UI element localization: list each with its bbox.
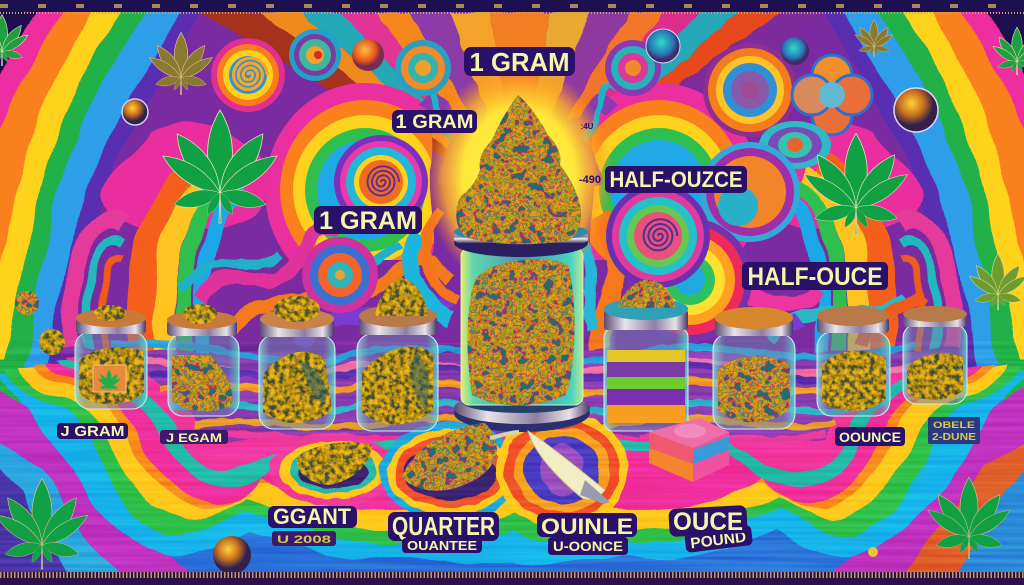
jar 3 — [259, 296, 335, 429]
jar 6 striped — [604, 280, 688, 431]
rings swirl: right — [759, 121, 831, 169]
cyan — [0, 375, 1024, 563]
label: small mark: :4U — [581, 122, 594, 131]
bud inside jar — [467, 260, 575, 406]
upper stripe field — [72, 352, 952, 443]
label: ggant: GGANT — [273, 504, 352, 529]
rainbow pool under large bud — [380, 422, 520, 522]
orb: left small — [122, 99, 148, 125]
swirl: above right of bud — [605, 40, 661, 96]
floor bands — [0, 352, 1024, 575]
label: ggant sub — [272, 531, 336, 546]
label: ounce two line — [928, 417, 980, 444]
central glow — [425, 63, 613, 293]
label: ounce two line: OBELE — [933, 420, 975, 430]
swirl: above left of bud — [395, 40, 451, 96]
orb: teal top — [646, 29, 680, 63]
jar 2 — [167, 304, 239, 416]
jar 1 — [75, 305, 147, 409]
label: pound — [684, 525, 753, 553]
label: quarter sub: OUANTEE — [407, 538, 477, 553]
orange-yellow inner — [32, 366, 992, 510]
leaf: top right — [991, 27, 1024, 75]
orb: gold right — [894, 88, 938, 132]
orb: orange top — [352, 39, 384, 71]
small side buds — [15, 291, 65, 355]
rainbow arch: lower right — [628, 218, 752, 342]
quatrefoil swirl — [792, 55, 872, 135]
jar 9 — [903, 306, 967, 404]
leaf: top left — [0, 15, 30, 66]
top ruler strip — [0, 0, 1024, 13]
right side rainbow — [814, 0, 1024, 420]
spiral: right centre — [606, 184, 710, 288]
label: half-ouzce prefix: -490 — [579, 174, 601, 186]
jar 7 — [713, 307, 795, 429]
jar 1 label — [93, 365, 126, 392]
label: ouinle sub: U-OONCE — [553, 538, 623, 554]
central big jar — [454, 95, 590, 432]
jar lid — [454, 222, 588, 257]
pink — [42, 365, 982, 510]
leaf: right edge olive — [967, 254, 1024, 310]
floor bud large — [402, 423, 519, 491]
green — [5, 370, 1019, 544]
pink edible block — [649, 418, 729, 482]
spiral: top left — [211, 38, 285, 112]
label: small gram 2 — [160, 430, 228, 445]
orb: bottom gold — [213, 536, 251, 574]
swirl: lower left of centre — [302, 237, 378, 313]
label: small gram 2: J EGAM — [166, 431, 222, 445]
giant bud — [456, 95, 581, 244]
left side rainbow — [0, 0, 210, 420]
floor bud small — [297, 442, 372, 485]
label: half-ouce: HALF-OUCE — [748, 263, 882, 291]
right magenta cloud and rainbow band — [753, 121, 953, 370]
paint streak texture — [0, 340, 1024, 572]
orb: small gold bottom right — [868, 547, 878, 557]
label: ouce: OUCE — [673, 508, 743, 536]
bottom ruler strip — [0, 572, 1024, 585]
label: third 1 gram: 1 GRAM — [319, 207, 417, 235]
leaf: upper left brown — [147, 32, 215, 94]
label: second 1 gram: 1 GRAM — [396, 112, 474, 133]
leaf: bottom left — [0, 479, 91, 569]
label: ounce two line: 2-DUNE — [932, 432, 976, 443]
left rainbow arch — [265, 83, 465, 297]
left magenta cloud and rainbow band — [71, 121, 271, 370]
label: top 1 gram: 1 GRAM — [470, 47, 570, 77]
leaf: bottom right — [925, 477, 1013, 559]
concentric swirl: top right — [703, 43, 797, 137]
stripe lines behind jars — [90, 344, 935, 441]
label: ggant sub: U 2008 — [277, 534, 331, 546]
central radiating rays — [200, 12, 830, 200]
teal — [55, 362, 969, 486]
inner magenta — [64, 360, 960, 470]
swirl: right orange — [700, 142, 800, 242]
leaf: large right — [800, 133, 912, 235]
label: quarter: QUARTER — [392, 511, 495, 541]
corners — [0, 380, 190, 575]
yellow — [20, 368, 1004, 530]
label: small 1 gram: J GRAM — [60, 423, 124, 440]
rainbow pool under joint — [496, 412, 628, 528]
central swirl clutter — [180, 85, 925, 350]
rolled joint — [528, 431, 610, 504]
label: half-ouzce: HALF-OUZCE — [610, 167, 742, 192]
label: ounce: OOUNCE — [839, 429, 901, 445]
orb: teal upper right — [781, 37, 809, 65]
deep blue floor — [0, 400, 1024, 575]
label: pound: POUND — [689, 529, 747, 552]
right rainbow arch — [559, 83, 759, 297]
jar 4 — [357, 278, 438, 431]
jar base — [454, 391, 590, 432]
spiral: left centre — [334, 135, 428, 229]
jar 8 — [817, 306, 890, 416]
leaf: large left — [158, 110, 282, 223]
label: ouinle: OUINLE — [541, 514, 633, 539]
leaf: upper right brown — [854, 20, 894, 57]
eye swirl: top — [289, 29, 341, 81]
rainbow pool under floor bud — [269, 434, 397, 506]
